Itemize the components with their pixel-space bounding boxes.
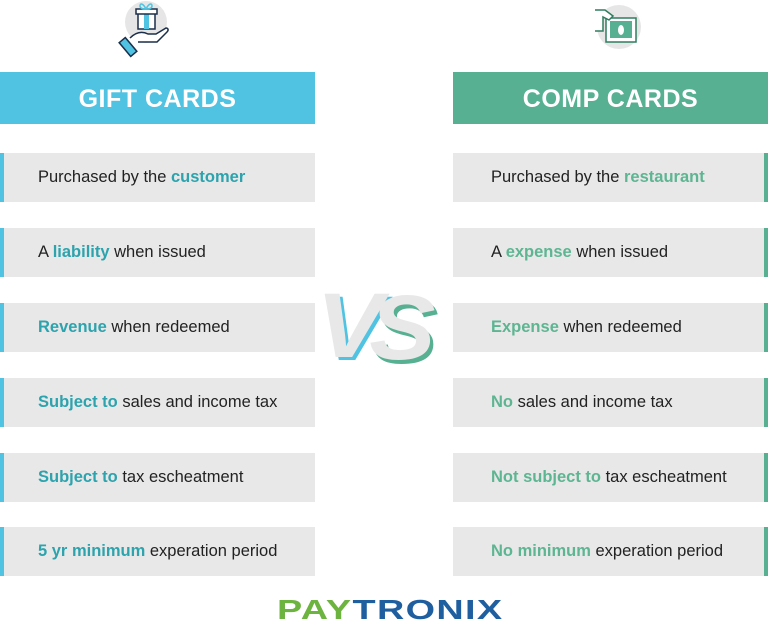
row left 4: Subject to sales and income tax <box>38 393 277 411</box>
header: comp cards <box>453 72 768 124</box>
row left 5: Subject to tax escheatment <box>38 468 243 486</box>
icon: gift in hand <box>118 1 169 58</box>
row left 6: 5 yr minimum experation period <box>38 542 277 560</box>
row right 6 <box>453 527 768 576</box>
row right 4: No sales and income tax <box>491 393 673 411</box>
row left 2: A liability when issued <box>38 243 206 261</box>
row left 5 <box>0 453 315 502</box>
row left 1: Purchased by the customer <box>38 168 245 186</box>
row left 4 <box>0 378 315 427</box>
row right 1: Purchased by the restaurant <box>491 168 705 186</box>
row right 4 <box>453 378 768 427</box>
header: gift cards: GIFT CARDS <box>79 85 236 113</box>
row right 1 <box>453 153 768 202</box>
header: gift cards <box>0 72 315 124</box>
header: comp cards: COMP CARDS <box>523 85 698 113</box>
row left 2 <box>0 228 315 277</box>
VS mark <box>316 285 439 370</box>
row left 1 <box>0 153 315 202</box>
row left 3: Revenue when redeemed <box>38 318 230 336</box>
row right 3: Expense when redeemed <box>491 318 682 336</box>
icon: cash in hand <box>595 5 641 49</box>
row right 2 <box>453 228 768 277</box>
row right 5: Not subject to tax escheatment <box>491 468 727 486</box>
row right 2: A expense when issued <box>491 243 668 261</box>
logo: paytronix: PAYTRONIX <box>277 594 503 625</box>
row right 3 <box>453 303 768 352</box>
row right 5 <box>453 453 768 502</box>
row left 6 <box>0 527 315 576</box>
row left 3 <box>0 303 315 352</box>
row right 6: No minimum experation period <box>491 542 723 560</box>
